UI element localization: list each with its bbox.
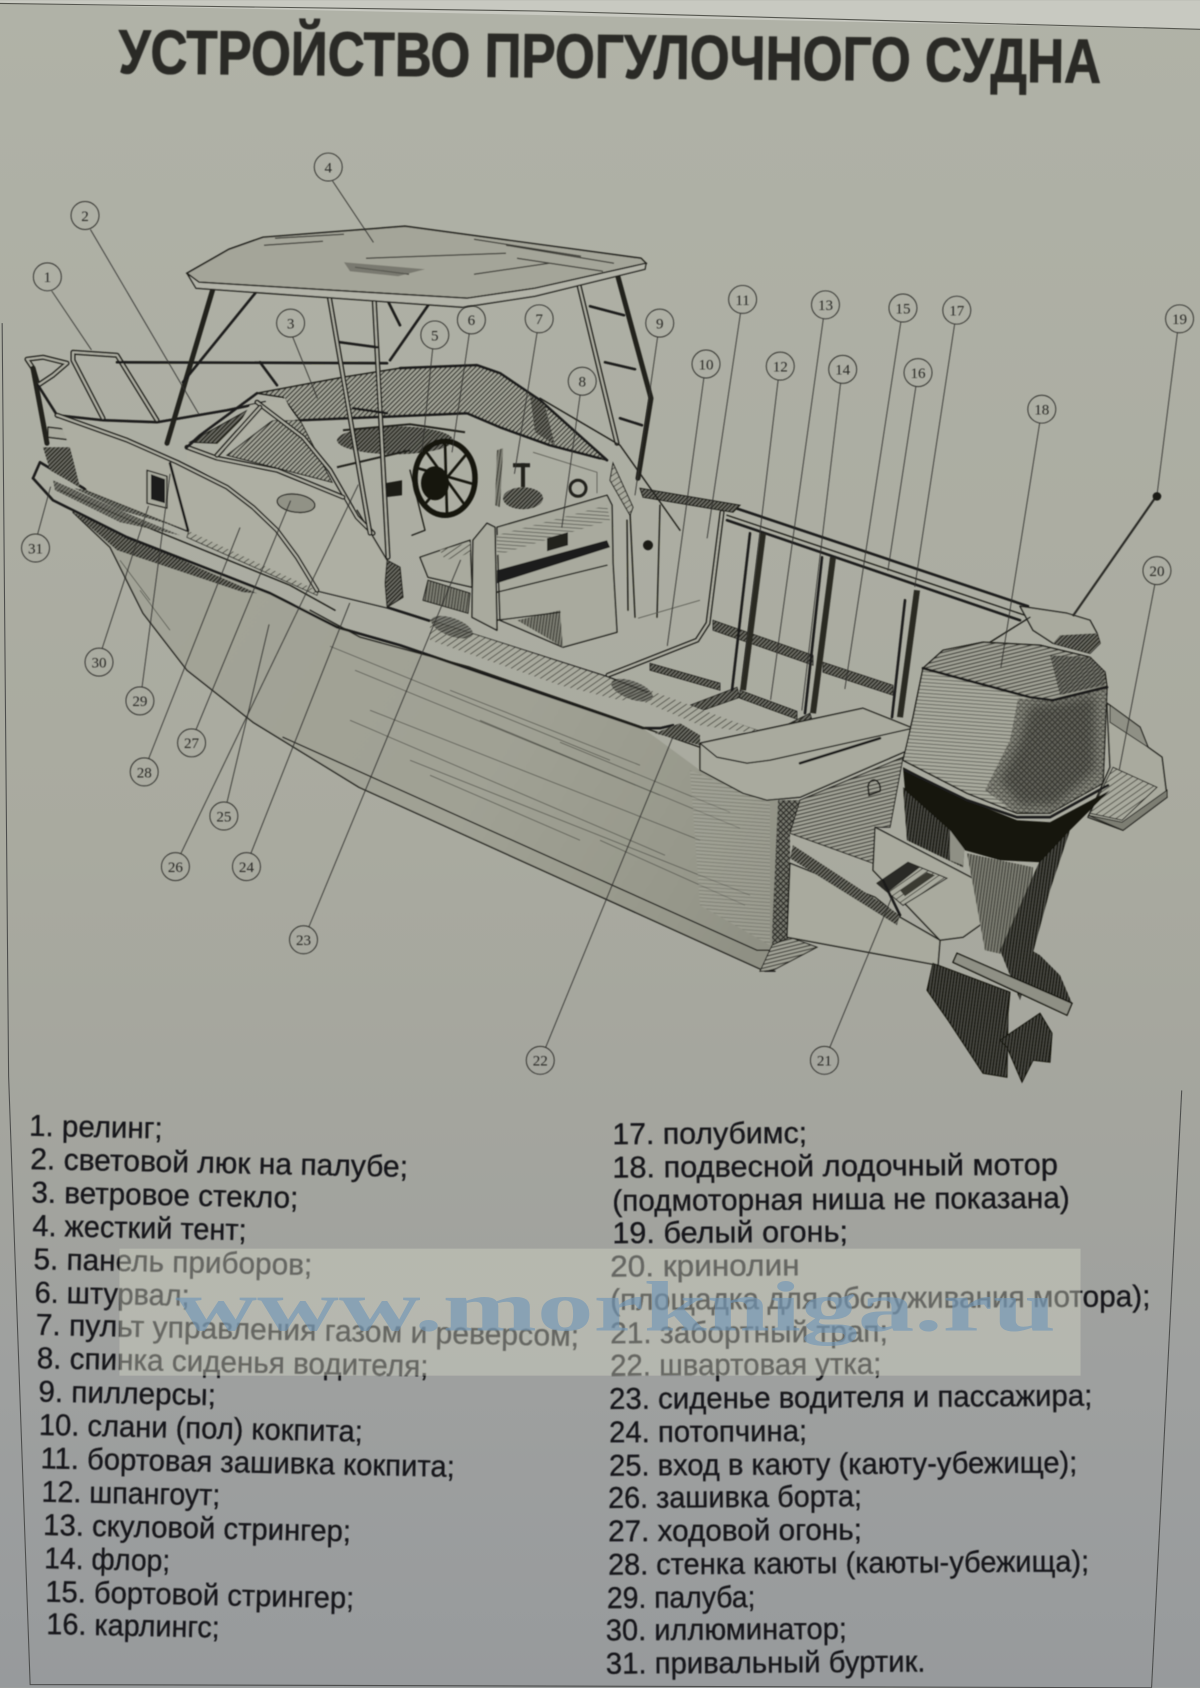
callout 26: 26 [168, 860, 183, 876]
parts list: right column: 20. кринолин [610, 1249, 800, 1284]
parts list: left column: 6. штурвал; [34, 1276, 190, 1313]
hard top canopy [187, 226, 646, 307]
callout 24: 24 [239, 860, 254, 876]
callout 29: 29 [132, 694, 147, 710]
callout 9 [635, 309, 674, 495]
callout 3: 3 [287, 316, 294, 332]
callout 27: 27 [184, 736, 200, 752]
parts list: left column: 9. пиллерсы; [38, 1376, 216, 1412]
swim ladder [787, 827, 1015, 965]
callout 21 [810, 899, 891, 1074]
windshield [187, 365, 607, 533]
callout 7: 7 [535, 312, 543, 328]
floor stringers [650, 620, 893, 737]
parts list: left column: 4. жесткий тент; [32, 1210, 247, 1247]
parts list: right column: (подмоторная ниша не показана) [612, 1182, 1070, 1218]
callout 2 [71, 201, 199, 415]
callout 26 [161, 485, 358, 881]
parts list: right column: 23. сиденье водителя и пассажира; [609, 1380, 1092, 1416]
parts list: right column: 30. иллюминатор; [606, 1613, 847, 1647]
rub rail and side deck [33, 462, 770, 747]
callout 15 [845, 294, 917, 689]
callout 12 [743, 352, 794, 678]
callout 21: 21 [817, 1054, 832, 1070]
parts list: right column: 24. потопчина; [609, 1415, 807, 1449]
hull side [53, 500, 817, 971]
callout 7 [514, 305, 553, 474]
callout 13 [771, 291, 839, 700]
callout 30 [85, 506, 149, 676]
T-top frame [167, 273, 680, 557]
parts list: right column: 29. палуба; [607, 1581, 756, 1615]
parts list: right column: 22. швартовая утка; [610, 1348, 881, 1383]
parts list: left column: 10. слани (пол) кокпита; [39, 1409, 363, 1449]
outboard motor [903, 642, 1110, 1082]
callout 1 [33, 263, 91, 350]
parts list: left column: 3. ветровое стекло; [31, 1176, 299, 1215]
callout 13: 13 [818, 298, 833, 314]
callout 22: 22 [533, 1054, 548, 1070]
callout 6: 6 [468, 313, 476, 329]
callout 4: 4 [324, 160, 332, 176]
callout 31: 31 [28, 541, 43, 557]
callout 10: 10 [698, 357, 714, 373]
callout 4 [314, 153, 373, 242]
parts list: left column: 8. спинка сиденья водителя; [36, 1342, 429, 1383]
callout 20: 20 [1149, 564, 1164, 580]
boat illustration [27, 226, 1167, 1082]
callout 28 [130, 528, 240, 786]
callout 11 [707, 285, 757, 538]
parts list: left column: 13. скуловой стрингер; [43, 1509, 351, 1548]
numbered callouts [22, 153, 1194, 1074]
callout 22 [526, 737, 673, 1074]
callout 20 [1119, 557, 1171, 770]
callout 29 [126, 474, 170, 715]
callout 16: 16 [911, 366, 926, 382]
callout 25 [210, 624, 269, 830]
callout 31 [22, 487, 51, 562]
callout 11: 11 [735, 293, 750, 309]
parts list: right column: 19. белый огонь; [612, 1216, 848, 1250]
callout 6 [452, 306, 485, 452]
crinoline platform [1088, 703, 1167, 830]
callout 28: 28 [137, 765, 152, 781]
callout 5: 5 [431, 328, 439, 344]
parts list: left column: 11. бортовая зашивка кокпита; [40, 1442, 455, 1484]
callout 17 [915, 296, 971, 587]
foredeck, bow cockpit and railing [27, 352, 387, 530]
callout 24 [232, 603, 350, 881]
instrument panel [337, 424, 465, 535]
callout 30: 30 [91, 655, 107, 671]
bulkhead 11 wall outline [608, 505, 722, 675]
callout 23 [290, 560, 461, 954]
parts list: left column: 5. панель приборов; [33, 1243, 313, 1282]
parts list: left column: 14. флор; [44, 1542, 171, 1578]
callout 19 [1073, 305, 1194, 616]
far side gunwale and stern deck [640, 488, 1100, 653]
parts list: right column: 27. ходовой огонь; [608, 1514, 862, 1548]
steering wheel [415, 441, 475, 515]
callout 12: 12 [773, 360, 788, 376]
parts list: right column: 18. подвесной лодочный мотор [612, 1149, 1058, 1185]
parts list: left column: 2. световой люк на палубе; [30, 1143, 408, 1184]
callout 14: 14 [835, 363, 851, 379]
cabin wall and windows [57, 415, 403, 607]
callout 16 [888, 359, 932, 571]
callout 18 [1001, 395, 1056, 667]
parts list: left column: 7. пульт управления газом и реверсом; [35, 1309, 579, 1353]
callout 10 [667, 350, 720, 646]
parts list: left column: 1. релинг; [29, 1110, 163, 1145]
stern quarter seat and transom [700, 708, 915, 863]
callout 5 [421, 321, 449, 452]
callout 1: 1 [44, 270, 51, 286]
parts list: right column: (площадка для обслуживания мотора); [610, 1280, 1151, 1317]
throttle control [495, 448, 633, 515]
driver seat [420, 495, 617, 647]
callout 9: 9 [656, 316, 663, 332]
parts list: left column [29, 1110, 579, 1645]
callout 3 [277, 309, 317, 398]
callout 27 [178, 501, 291, 757]
parts list: right column: 26. зашивка борта; [608, 1480, 862, 1515]
callout 2: 2 [81, 209, 89, 225]
parts list: right column: 25. вход в каюту (каюту-убежище); [609, 1446, 1077, 1483]
parts list: right column: 21. забортный трап; [610, 1315, 888, 1350]
parts list: left column: 15. бортовой стрингер; [45, 1576, 355, 1615]
callout 19: 19 [1172, 312, 1187, 328]
callout 25: 25 [216, 809, 231, 825]
frames [732, 533, 917, 717]
parts list: right column [606, 1117, 1151, 1681]
callout 23: 23 [296, 933, 311, 949]
callout 18: 18 [1034, 403, 1049, 419]
parts list: right column: 28. стенка каюты (каюты-убежища); [608, 1545, 1089, 1582]
parts list: right column: 31. привальный буртик. [606, 1646, 926, 1681]
watermark band: www.morkniga.ru [175, 1268, 1056, 1346]
callout 15: 15 [895, 301, 910, 317]
parts list: right column: 17. полубимс; [612, 1117, 807, 1151]
parts list: left column: 12. шпангоут; [41, 1476, 221, 1512]
watermark band [119, 1249, 1081, 1376]
parts list: left column: 16. карлингс; [46, 1608, 220, 1645]
callout 8 [562, 367, 596, 528]
callout 17: 17 [949, 304, 965, 320]
callout 8: 8 [578, 375, 586, 391]
callout 14 [802, 355, 857, 711]
